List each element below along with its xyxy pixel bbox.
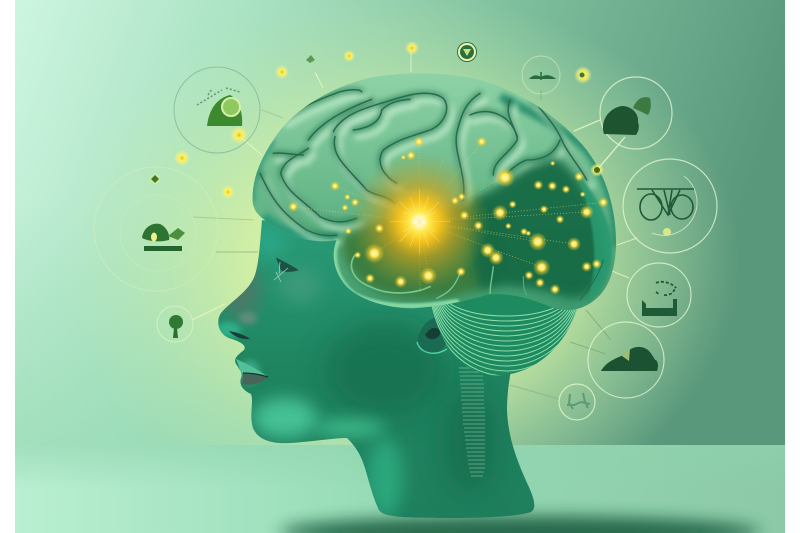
icon: mound with magnifier [197, 88, 242, 126]
icon: hill [601, 347, 658, 371]
brain rim shading [500, 97, 616, 247]
face shading [215, 226, 496, 518]
floor with cast shadow [15, 445, 785, 533]
icon: bicycle [637, 189, 694, 220]
dark inner temporal region [342, 199, 508, 299]
ear [417, 318, 447, 354]
neuron sparks [288, 136, 609, 295]
head and neck [215, 220, 534, 518]
icon: small sprout in circle [306, 55, 315, 63]
central light burst [349, 152, 489, 292]
icon: plant on a book [529, 72, 556, 80]
eye [274, 258, 298, 282]
icon: bush with sprig [603, 97, 651, 135]
icon: basket with dots [642, 282, 677, 316]
icon: small tree [169, 315, 183, 338]
icon: two figures [567, 393, 590, 409]
cerebellum with concentric stripes [432, 294, 578, 376]
connector lines between icons and brain [192, 50, 637, 399]
glowing dots [149, 41, 671, 236]
soft fold shading [260, 90, 587, 236]
brain [253, 73, 616, 310]
neural rays [293, 142, 603, 293]
dark parietal region [470, 157, 607, 299]
sulci [260, 90, 587, 236]
icon: tree and tools on a bar [142, 224, 185, 251]
spinal cord stripes [459, 368, 485, 476]
mouth [236, 359, 268, 385]
temporal lobe rim and folds [334, 242, 603, 306]
nostril [229, 331, 250, 339]
gyri highlights [265, 96, 591, 242]
icon circles [94, 45, 717, 420]
